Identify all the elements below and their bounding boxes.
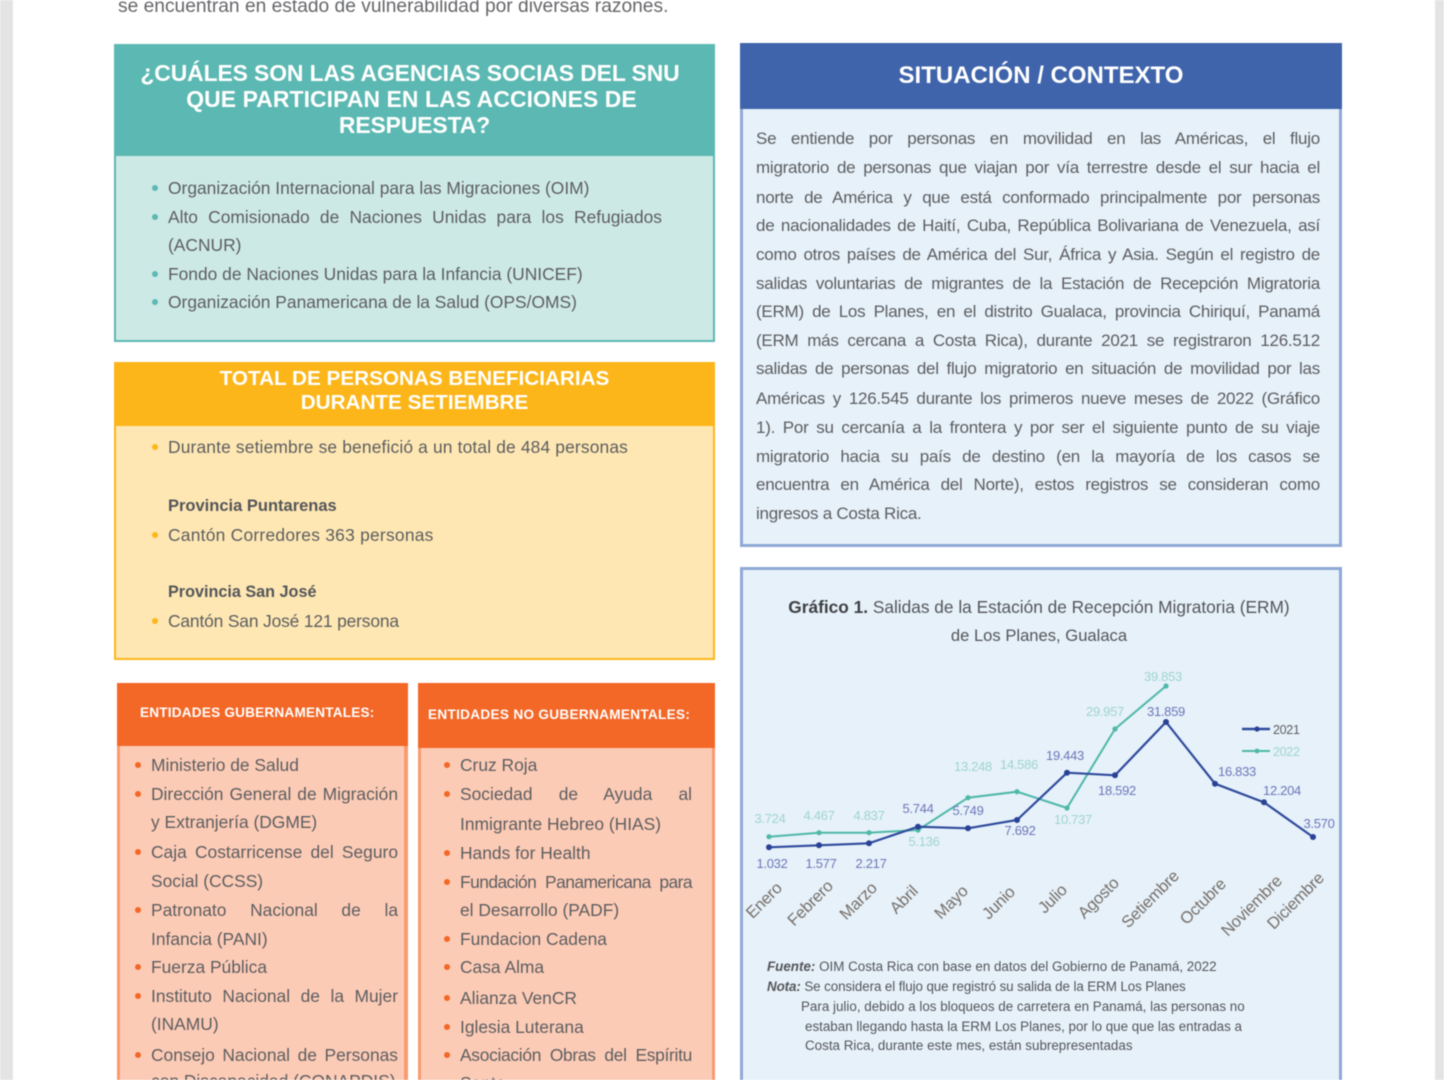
data labels 2021 bbox=[756, 704, 1335, 871]
right page edge bbox=[1435, 0, 1444, 1080]
legend: 2021 bbox=[1273, 723, 1300, 737]
text block: contexto: Se entiende por personas en movilidad en las Américas, el flujo bbox=[756, 129, 1320, 148]
line chart bbox=[743, 669, 1335, 940]
text block: contexto: salidas de personas del flujo migratorio en situación de movilidad por las bbox=[756, 359, 1320, 378]
heading: situación / contexto bbox=[740, 43, 1342, 109]
heading: entidades no gubernamentales bbox=[418, 683, 715, 748]
panel: agencias socias bbox=[114, 44, 715, 342]
list: beneficiarias: Cantón Corredores 363 personas bbox=[168, 525, 434, 545]
source notes: Nota: Se considera el flujo que registró su salida de la ERM Los Planes bbox=[767, 979, 1186, 994]
panel: total de personas beneficiarias bbox=[114, 362, 715, 660]
list: entidades no gubernamentales: Asociación Obras del Espíritu bbox=[460, 1045, 692, 1065]
list: beneficiarias: Provincia San José bbox=[168, 583, 316, 601]
heading: entidades no gubernamentales: ENTIDADES NO GUBERNAMENTALES: bbox=[428, 707, 690, 722]
series 2021 bbox=[766, 719, 1316, 850]
text block: contexto: de nacionalidades de Haití, Cuba, República Bolivariana de Venezuela, así bbox=[756, 216, 1320, 235]
list: entidades no gubernamentales: Inmigrante Hebreo (HIAS) bbox=[460, 814, 661, 834]
data labels 2021: 2.217 bbox=[855, 856, 887, 871]
month axis labels: Mayo bbox=[931, 882, 972, 923]
text block: contexto: como otros países de América del Sur, África y Asia. Según el registro de bbox=[756, 245, 1320, 264]
month axis labels: Enero bbox=[743, 879, 786, 922]
month axis labels: Julio bbox=[1035, 881, 1071, 917]
heading: entidades gubernamentales bbox=[117, 683, 408, 746]
list: entidades gubernamentales bbox=[134, 755, 399, 1080]
text block: contexto: ingresos a Costa Rica. bbox=[756, 504, 922, 523]
data labels 2022: 10.737 bbox=[1054, 812, 1092, 827]
list: entidades gubernamentales: Instituto Nacional de la Mujer bbox=[151, 986, 398, 1006]
list: entidades gubernamentales: Fuerza Pública bbox=[151, 957, 267, 977]
list: entidades gubernamentales: Ministerio de Salud bbox=[151, 755, 299, 775]
data labels 2021: 5.749 bbox=[952, 803, 984, 818]
text block: contexto bbox=[756, 129, 1321, 524]
panel: gráfico 1 bbox=[740, 567, 1342, 1080]
heading: agencias socias: RESPUESTA? bbox=[339, 112, 490, 138]
chart title bbox=[788, 597, 1290, 645]
list: entidades no gubernamentales: Hands for Health bbox=[460, 843, 590, 863]
panel: situación / contexto bbox=[740, 43, 1342, 547]
legend bbox=[1242, 723, 1300, 759]
list: entidades gubernamentales: Consejo Nacional de Personas bbox=[151, 1045, 398, 1065]
month axis labels: Setiembre bbox=[1118, 867, 1183, 932]
list: entidades no gubernamentales: Sociedad de Ayuda al bbox=[460, 784, 692, 804]
list: entidades no gubernamentales: Alianza VenCR bbox=[460, 988, 577, 1008]
data labels 2021: 3.570 bbox=[1303, 816, 1335, 831]
source notes: Costa Rica, durante este mes, están subrepresentadas bbox=[805, 1038, 1133, 1053]
data labels 2022: 3.724 bbox=[754, 811, 786, 826]
data labels 2021: 1.032 bbox=[756, 856, 788, 871]
text block: contexto: (ERM) de Los Planes, en el distrito Gualaca, provincia Chiriquí, Panamá bbox=[756, 302, 1320, 321]
list: entidades no gubernamentales: Fundación Panamericana para bbox=[460, 872, 692, 892]
list: entidades no gubernamentales: Iglesia Luterana bbox=[460, 1017, 584, 1037]
month axis labels: Agosto bbox=[1075, 874, 1123, 922]
chart title: Gráfico 1. Salidas de la Estación de Recepción Migratoria (ERM) bbox=[788, 597, 1290, 617]
source notes: Para julio, debido a los bloqueos de carretera en Panamá, las personas no bbox=[801, 999, 1245, 1014]
heading: total beneficiarias: TOTAL DE PERSONAS BENEFICIARIAS bbox=[220, 367, 609, 390]
list: entidades gubernamentales: (INAMU) bbox=[151, 1014, 219, 1034]
text block: contexto: 1). Por su cercanía a la frontera y por ser el siguiente punto de su viaje bbox=[756, 418, 1320, 437]
list: agencias: Fondo de Naciones Unidas para la Infancia (UNICEF) bbox=[168, 264, 583, 284]
month axis labels: Octubre bbox=[1177, 875, 1230, 928]
heading: entidades gubernamentales: ENTIDADES GUBERNAMENTALES: bbox=[140, 705, 375, 720]
data labels 2022: 4.467 bbox=[803, 808, 835, 823]
month axis labels: Junio bbox=[979, 883, 1019, 923]
data labels 2022: 4.837 bbox=[853, 808, 885, 823]
heading: agencias socias: QUE PARTICIPAN EN LAS ACCIONES DE bbox=[186, 86, 637, 112]
list: entidades gubernamentales: Infancia (PANI) bbox=[151, 929, 268, 949]
legend: 2022 bbox=[1273, 745, 1300, 759]
data labels 2022 bbox=[754, 669, 1182, 849]
source notes bbox=[766, 959, 1245, 1054]
panel: entidades no gubernamentales bbox=[418, 683, 715, 1080]
month axis labels: Marzo bbox=[836, 879, 881, 924]
heading: agencias socias bbox=[116, 46, 713, 156]
text block: contexto: norte de América y que está conformado principalmente por personas bbox=[756, 188, 1320, 207]
text block: contexto: migratorio hacia su país de destino (en la mayoría de los casos se bbox=[756, 447, 1320, 466]
list: entidades no gubernamentales: Casa Alma bbox=[460, 957, 544, 977]
list: agencias bbox=[152, 178, 662, 312]
data labels 2022: 14.586 bbox=[1000, 757, 1038, 772]
data labels 2021: 16.833 bbox=[1218, 764, 1256, 779]
data labels 2022: 39.853 bbox=[1144, 669, 1182, 684]
panel: entidades gubernamentales bbox=[117, 683, 408, 1080]
month axis labels: Abril bbox=[886, 882, 922, 917]
list: agencias: Alto Comisionado de Naciones Unidas para los Refugiados bbox=[168, 207, 662, 227]
source notes: Fuente: OIM Costa Rica con base en datos del Gobierno de Panamá, 2022 bbox=[767, 959, 1217, 974]
data labels 2021: 5.744 bbox=[902, 801, 934, 816]
text block: contexto: encuentra en América del Norte), estos registros se consideran como bbox=[756, 475, 1320, 494]
list: agencias: (ACNUR) bbox=[168, 235, 241, 255]
list: entidades no gubernamentales: el Desarrollo (PADF) bbox=[460, 900, 619, 920]
list: entidades no gubernamentales bbox=[443, 755, 694, 1080]
chart title: de Los Planes, Gualaca bbox=[951, 626, 1127, 645]
list: beneficiarias: Cantón San José 121 persona bbox=[168, 611, 399, 631]
left page edge bbox=[0, 0, 13, 1080]
list: entidades no gubernamentales: Fundacion Cadena bbox=[460, 929, 607, 949]
list: entidades gubernamentales: Caja Costarricense del Seguro bbox=[151, 842, 398, 862]
month axis labels: Febrero bbox=[784, 877, 837, 930]
heading: agencias socias: ¿CUÁLES SON LAS AGENCIAS SOCIAS DEL SNU bbox=[140, 60, 680, 86]
list: beneficiarias: Provincia Puntarenas bbox=[168, 497, 337, 515]
list: entidades gubernamentales: Social (CCSS) bbox=[151, 871, 263, 891]
data labels 2022: 5.136 bbox=[908, 834, 940, 849]
data labels 2021: 31.859 bbox=[1147, 704, 1185, 719]
data labels 2021: 19.443 bbox=[1046, 748, 1084, 763]
series 2022 bbox=[766, 683, 1169, 839]
data labels 2021: 18.592 bbox=[1098, 783, 1136, 798]
data labels 2021: 7.692 bbox=[1004, 823, 1036, 838]
list: entidades gubernamentales: y Extranjería (DGME) bbox=[151, 812, 317, 832]
list: entidades no gubernamentales: Cruz Roja bbox=[460, 755, 537, 775]
list: beneficiarias: Durante setiembre se benefició a un total de 484 personas bbox=[168, 437, 628, 457]
month axis labels: Diciembre bbox=[1264, 869, 1328, 933]
text block: contexto: Américas y 126.545 durante los primeros nueve meses de 2022 (Gráfico bbox=[756, 389, 1320, 408]
text block: contexto: (ERM más cercana a Costa Rica), durante 2021 se registraron 126.512 bbox=[756, 331, 1320, 350]
list: entidades gubernamentales: Patronato Nacional de la bbox=[151, 900, 398, 920]
source notes: estaban llegando hasta la ERM Los Planes, por lo que que las entradas a bbox=[805, 1019, 1242, 1034]
heading: total beneficiarias bbox=[116, 364, 713, 426]
data labels 2022: 13.248 bbox=[954, 759, 992, 774]
data labels 2021: 1.577 bbox=[805, 856, 837, 871]
data labels 2022: 29.957 bbox=[1086, 704, 1124, 719]
list: entidades gubernamentales: Dirección General de Migración bbox=[151, 784, 398, 804]
list: agencias: Organización Panamericana de la Salud (OPS/OMS) bbox=[168, 292, 577, 312]
month axis labels: Noviembre bbox=[1218, 872, 1286, 940]
month axis labels bbox=[743, 867, 1328, 940]
heading: total beneficiarias: DURANTE SETIEMBRE bbox=[301, 391, 528, 414]
list: agencias: Organización Internacional para las Migraciones (OIM) bbox=[168, 178, 589, 198]
list: beneficiarias bbox=[151, 437, 628, 632]
heading: situación / contexto: SITUACIÓN / CONTEXTO bbox=[899, 62, 1183, 89]
text block: contexto: salidas voluntarias de migrantes de la Estación de Recepción Migratoria bbox=[756, 274, 1320, 293]
data labels 2021: 12.204 bbox=[1263, 783, 1301, 798]
text block: contexto: migratorio de personas que viajan por vía terrestre desde el sur hacia el bbox=[756, 158, 1320, 177]
